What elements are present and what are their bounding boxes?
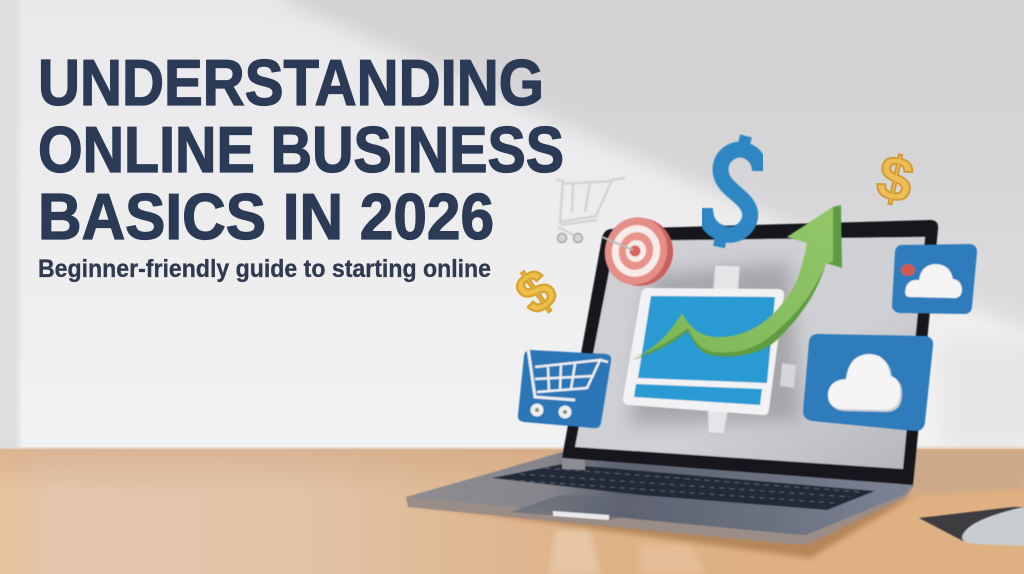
icon: shopping cart tile xyxy=(513,343,611,428)
icon: large cloud tile xyxy=(803,334,933,431)
background: wall xyxy=(0,0,1024,454)
title: UNDERSTANDING xyxy=(38,46,544,119)
growth arrow xyxy=(630,205,842,361)
title xyxy=(38,46,564,253)
laptop screen xyxy=(562,220,938,485)
icon: target xyxy=(596,209,682,295)
icon: gold dollar left: $ xyxy=(504,256,568,328)
laptop base xyxy=(406,452,915,545)
laptop xyxy=(406,220,938,545)
background: wooden table xyxy=(0,447,1024,574)
chart panel on screen xyxy=(623,265,796,434)
icon: blue dollar sign xyxy=(705,136,760,247)
icon: gold dollar top right: $ xyxy=(871,142,919,217)
title: BASICS IN 2026 xyxy=(38,180,494,253)
subtitle: Beginner-friendly guide to starting online xyxy=(38,255,491,283)
tablet and device on table xyxy=(919,507,1024,546)
icon: outline shopping cart xyxy=(556,178,625,242)
icon: small cloud tile xyxy=(892,244,977,314)
title: ONLINE BUSINESS xyxy=(38,113,564,186)
